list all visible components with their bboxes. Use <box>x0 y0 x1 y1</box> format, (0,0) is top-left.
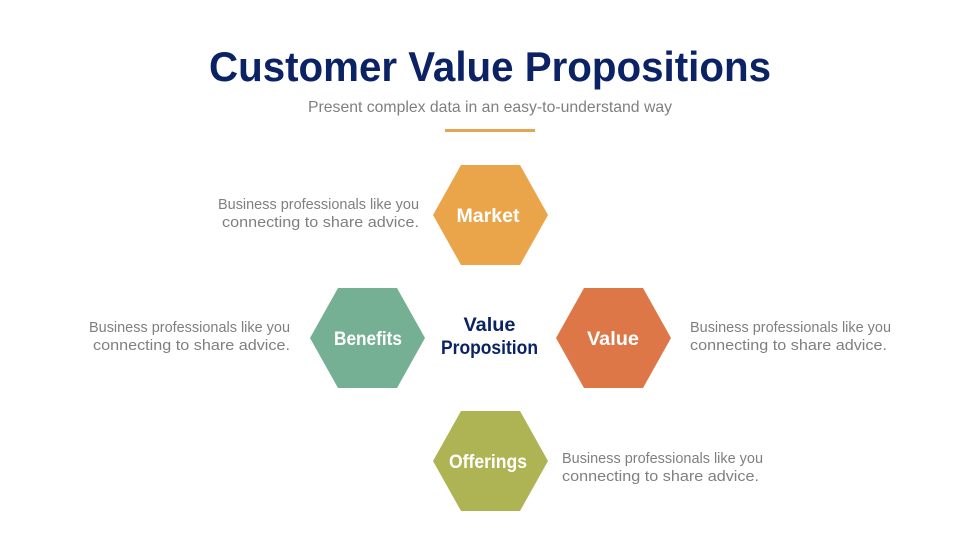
text block: Offerings description <box>562 450 763 485</box>
hexagon: Value: Value <box>587 329 639 350</box>
title underline <box>445 129 535 132</box>
text block: Market description: Business professionals like you <box>218 196 419 213</box>
text block: Value description: connecting to share advice. <box>690 337 887 354</box>
hexagon: Offerings <box>433 411 548 511</box>
hexagon: Market <box>433 165 548 265</box>
center label: Value Proposition: Proposition <box>441 338 538 359</box>
center label: Value Proposition <box>441 315 538 359</box>
hexagon: Benefits: Benefits <box>334 329 402 350</box>
subtitle: Present complex data in an easy-to-understand way <box>308 99 672 116</box>
title: Customer Value Propositions <box>209 43 771 90</box>
text block: Value description: Business professionals like you <box>690 319 891 336</box>
text block: Offerings description: connecting to share advice. <box>562 468 759 485</box>
text block: Value description <box>690 319 891 354</box>
text block: Market description: connecting to share advice. <box>222 214 419 231</box>
hexagon: Offerings: Offerings <box>449 452 527 473</box>
hexagon: Value <box>556 288 671 388</box>
text block: Benefits description: connecting to share advice. <box>93 337 290 354</box>
text block: Benefits description: Business professionals like you <box>89 319 290 336</box>
hexagon: Market: Market <box>456 206 520 227</box>
text block: Market description <box>218 196 419 231</box>
hexagon: Benefits <box>310 288 425 388</box>
center label: Value Proposition: Value <box>464 315 516 336</box>
text block: Offerings description: Business professionals like you <box>562 450 763 467</box>
text block: Benefits description <box>89 319 290 354</box>
